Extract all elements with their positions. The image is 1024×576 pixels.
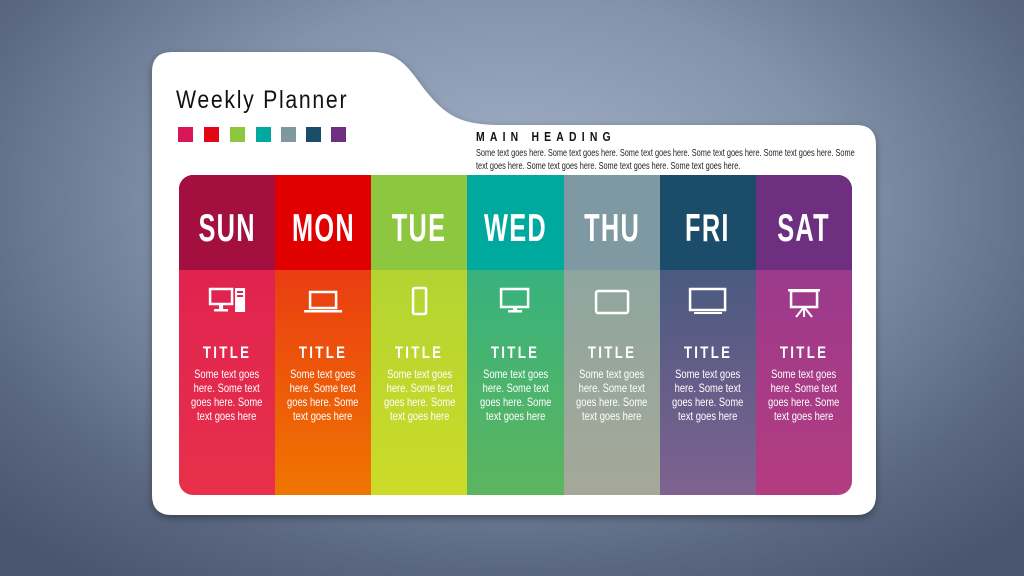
column: FRI: text goes here — [678, 409, 737, 423]
column: TUE: TITLE — [395, 343, 444, 362]
column: TUE: TUE — [392, 207, 447, 250]
column: TUE: Some text goes — [387, 367, 452, 381]
column: MON: TITLE — [299, 343, 347, 362]
main text: Some text goes here. Some text goes here. Some text goes here. Some text goes here. Some text goes here. Some text goes here. Some text goes here. Some text goes here. Some text goes here. — [476, 147, 855, 172]
column: SUN: SUN — [198, 207, 256, 250]
column: SAT — [756, 175, 852, 495]
column: SUN: TITLE — [203, 343, 251, 362]
main heading: MAIN HEADING — [476, 129, 616, 144]
column: WED: here. Some text — [482, 381, 548, 395]
column: SAT: text goes here — [774, 409, 834, 423]
column: WED: goes here. Some — [480, 395, 551, 409]
column: WED: WED — [484, 207, 547, 250]
column: FRI: FRI — [685, 207, 730, 250]
column: FRI — [660, 175, 756, 495]
column: TUE — [371, 175, 467, 495]
column: TUE: goes here. Some — [384, 395, 455, 409]
column: TUE: text goes here — [390, 409, 449, 423]
column: FRI: here. Some text — [675, 381, 741, 395]
column: SAT: here. Some text — [771, 381, 837, 395]
column: FRI: TITLE — [684, 343, 732, 362]
column: THU: TITLE — [587, 343, 636, 362]
title: Weekly Planner — [176, 86, 348, 114]
column: MON: text goes here — [293, 409, 353, 423]
column: SUN: goes here. Some — [191, 395, 263, 409]
column: THU: goes here. Some — [576, 395, 647, 409]
column: MON: here. Some text — [290, 381, 356, 395]
column: MON: MON — [292, 207, 355, 250]
column: SUN — [179, 175, 275, 495]
column: MON: Some text goes — [291, 367, 356, 381]
column: THU: here. Some text — [579, 381, 645, 395]
column: FRI: goes here. Some — [672, 395, 743, 409]
column: FRI: Some text goes — [675, 367, 740, 381]
column: MON — [275, 175, 371, 495]
column: SAT: SAT — [778, 207, 830, 250]
column: SUN: here. Some text — [194, 381, 260, 395]
column: THU: text goes here — [582, 409, 641, 423]
column: MON: goes here. Some — [287, 395, 359, 409]
column: SUN: Some text goes — [194, 367, 260, 381]
column: WED: TITLE — [491, 343, 540, 362]
column: WED — [467, 175, 564, 495]
column: THU: THU — [584, 207, 640, 250]
column: TUE: here. Some text — [386, 381, 452, 395]
column: SAT: TITLE — [780, 343, 828, 362]
weekly grid — [179, 175, 852, 495]
column: SUN: text goes here — [197, 409, 257, 423]
column: SAT: Some text goes — [771, 367, 836, 381]
column: THU — [564, 175, 660, 495]
column: THU: Some text goes — [579, 367, 644, 381]
column: SAT: goes here. Some — [768, 395, 840, 409]
column: WED: text goes here — [486, 409, 545, 423]
column: WED: Some text goes — [483, 367, 548, 381]
color swatches — [178, 127, 346, 142]
